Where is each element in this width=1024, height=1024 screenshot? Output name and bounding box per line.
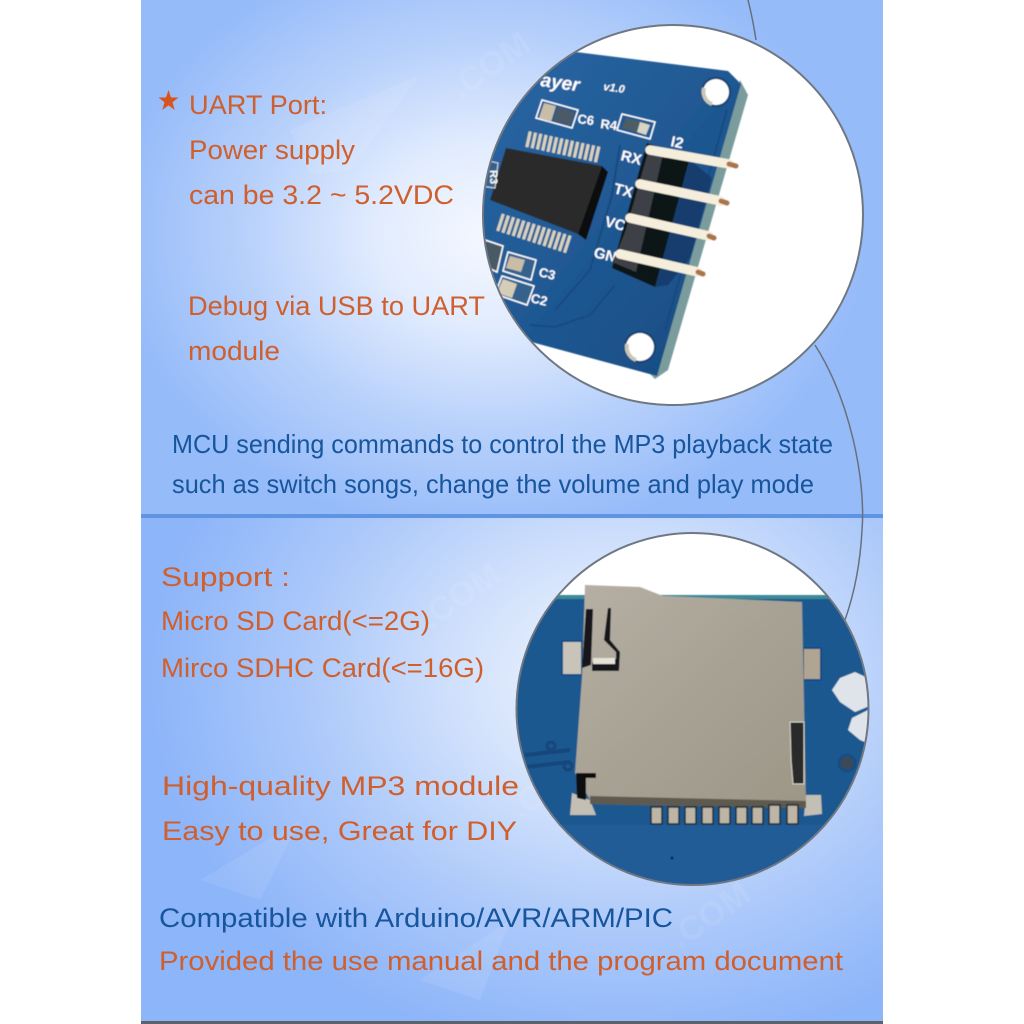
text block: card support: Mirco SDHC Card(<=16G): [161, 653, 484, 683]
capacitors C3 and C2: [480, 240, 536, 305]
shell slot right: [790, 722, 804, 784]
IC chip: [490, 148, 602, 234]
circle: UART header photo: [470, 25, 863, 405]
silkscreen labels: C2: [529, 290, 549, 309]
silkscreen labels: I2: [669, 133, 685, 153]
silkscreen labels: TX: [612, 180, 635, 202]
section divider: [141, 514, 883, 518]
contact pins: [651, 805, 798, 824]
capacitor C6: [536, 100, 578, 128]
silkscreen labels: R4: [600, 116, 619, 133]
text block: UART port: can be 3.2 ~ 5.2VDC: [189, 180, 454, 210]
watermarks: .COM: [663, 875, 757, 957]
panel: UART section background: [141, 0, 883, 515]
text block: quality: High-quality MP3 module: [162, 771, 519, 801]
PCB: [518, 598, 868, 826]
connector line between the two circles: [748, 0, 863, 620]
circle outline: [516, 533, 868, 885]
text block: MCU commands: such as switch songs, change the volume and play mode: [172, 469, 814, 499]
watermarks: .COM: [413, 555, 507, 637]
text block: card support: Support :: [161, 562, 290, 592]
text block: MCU commands: [172, 429, 833, 499]
silkscreen labels: C6: [577, 111, 595, 128]
PCB traces: [525, 750, 570, 767]
silkscreen labels: R3: [487, 170, 499, 184]
PCB board edge: [650, 80, 748, 379]
text block: UART port: [189, 90, 454, 210]
mounting hole top: [701, 77, 731, 107]
silkscreen labels: RX: [619, 147, 643, 169]
silkscreen labels: [487, 111, 685, 309]
IC pins top: [527, 139, 600, 155]
white test pads: [832, 672, 872, 712]
pin header housing: [655, 160, 712, 287]
watermarks: [200, 25, 807, 1000]
text block: quality: [162, 771, 519, 846]
panel: SD card section background: [141, 517, 883, 1021]
bottom border: [141, 1021, 883, 1024]
resistor R4: [617, 114, 655, 139]
header pins: [620, 150, 736, 274]
corner notch: [576, 773, 596, 800]
mounting hole bottom: [624, 331, 656, 363]
watermarks: .COM: [713, 115, 807, 197]
photo: PCB top view: [470, 50, 748, 379]
mounting hole: [839, 755, 855, 771]
text block: card support: [161, 562, 484, 683]
text block: debug: module: [188, 336, 280, 366]
board silkscreen title: ayer: [539, 70, 583, 97]
text: documentation: Provided the use manual and the program document: [159, 946, 844, 976]
photo: PCB top view: v1.0: [603, 81, 626, 96]
IC pins bottom: [499, 222, 570, 245]
photo: SD slot: [518, 584, 868, 884]
metal shell: [575, 585, 806, 803]
silkscreen labels: GN: [592, 244, 618, 266]
text block: UART port: Power supply: [189, 135, 355, 165]
solder pads: [562, 641, 822, 816]
text block: MCU commands: MCU sending commands to control the MP3 playback state: [172, 429, 833, 459]
silkscreen labels: C3: [537, 264, 557, 283]
text block: debug: [188, 291, 485, 366]
icon: star bullet: [158, 90, 178, 110]
PCB board: [470, 50, 741, 376]
silkscreen labels: VC: [603, 213, 628, 235]
shell slot left: [582, 609, 593, 668]
text: compatibility: Compatible with Arduino/AVR/ARM/PIC: [159, 903, 673, 933]
circle outline: [483, 25, 863, 405]
watermarks: .COM: [443, 25, 537, 107]
text block: UART port: UART Port:: [189, 90, 327, 120]
text block: debug: Debug via USB to UART: [188, 291, 485, 321]
watermarks: .COM: [503, 745, 597, 827]
text block: card support: Micro SD Card(<=2G): [161, 606, 430, 636]
circle: SD card slot photo: [516, 532, 870, 886]
text block: quality: Easy to use, Great for DIY: [162, 816, 517, 846]
resistor R3 fragment: [486, 160, 500, 190]
